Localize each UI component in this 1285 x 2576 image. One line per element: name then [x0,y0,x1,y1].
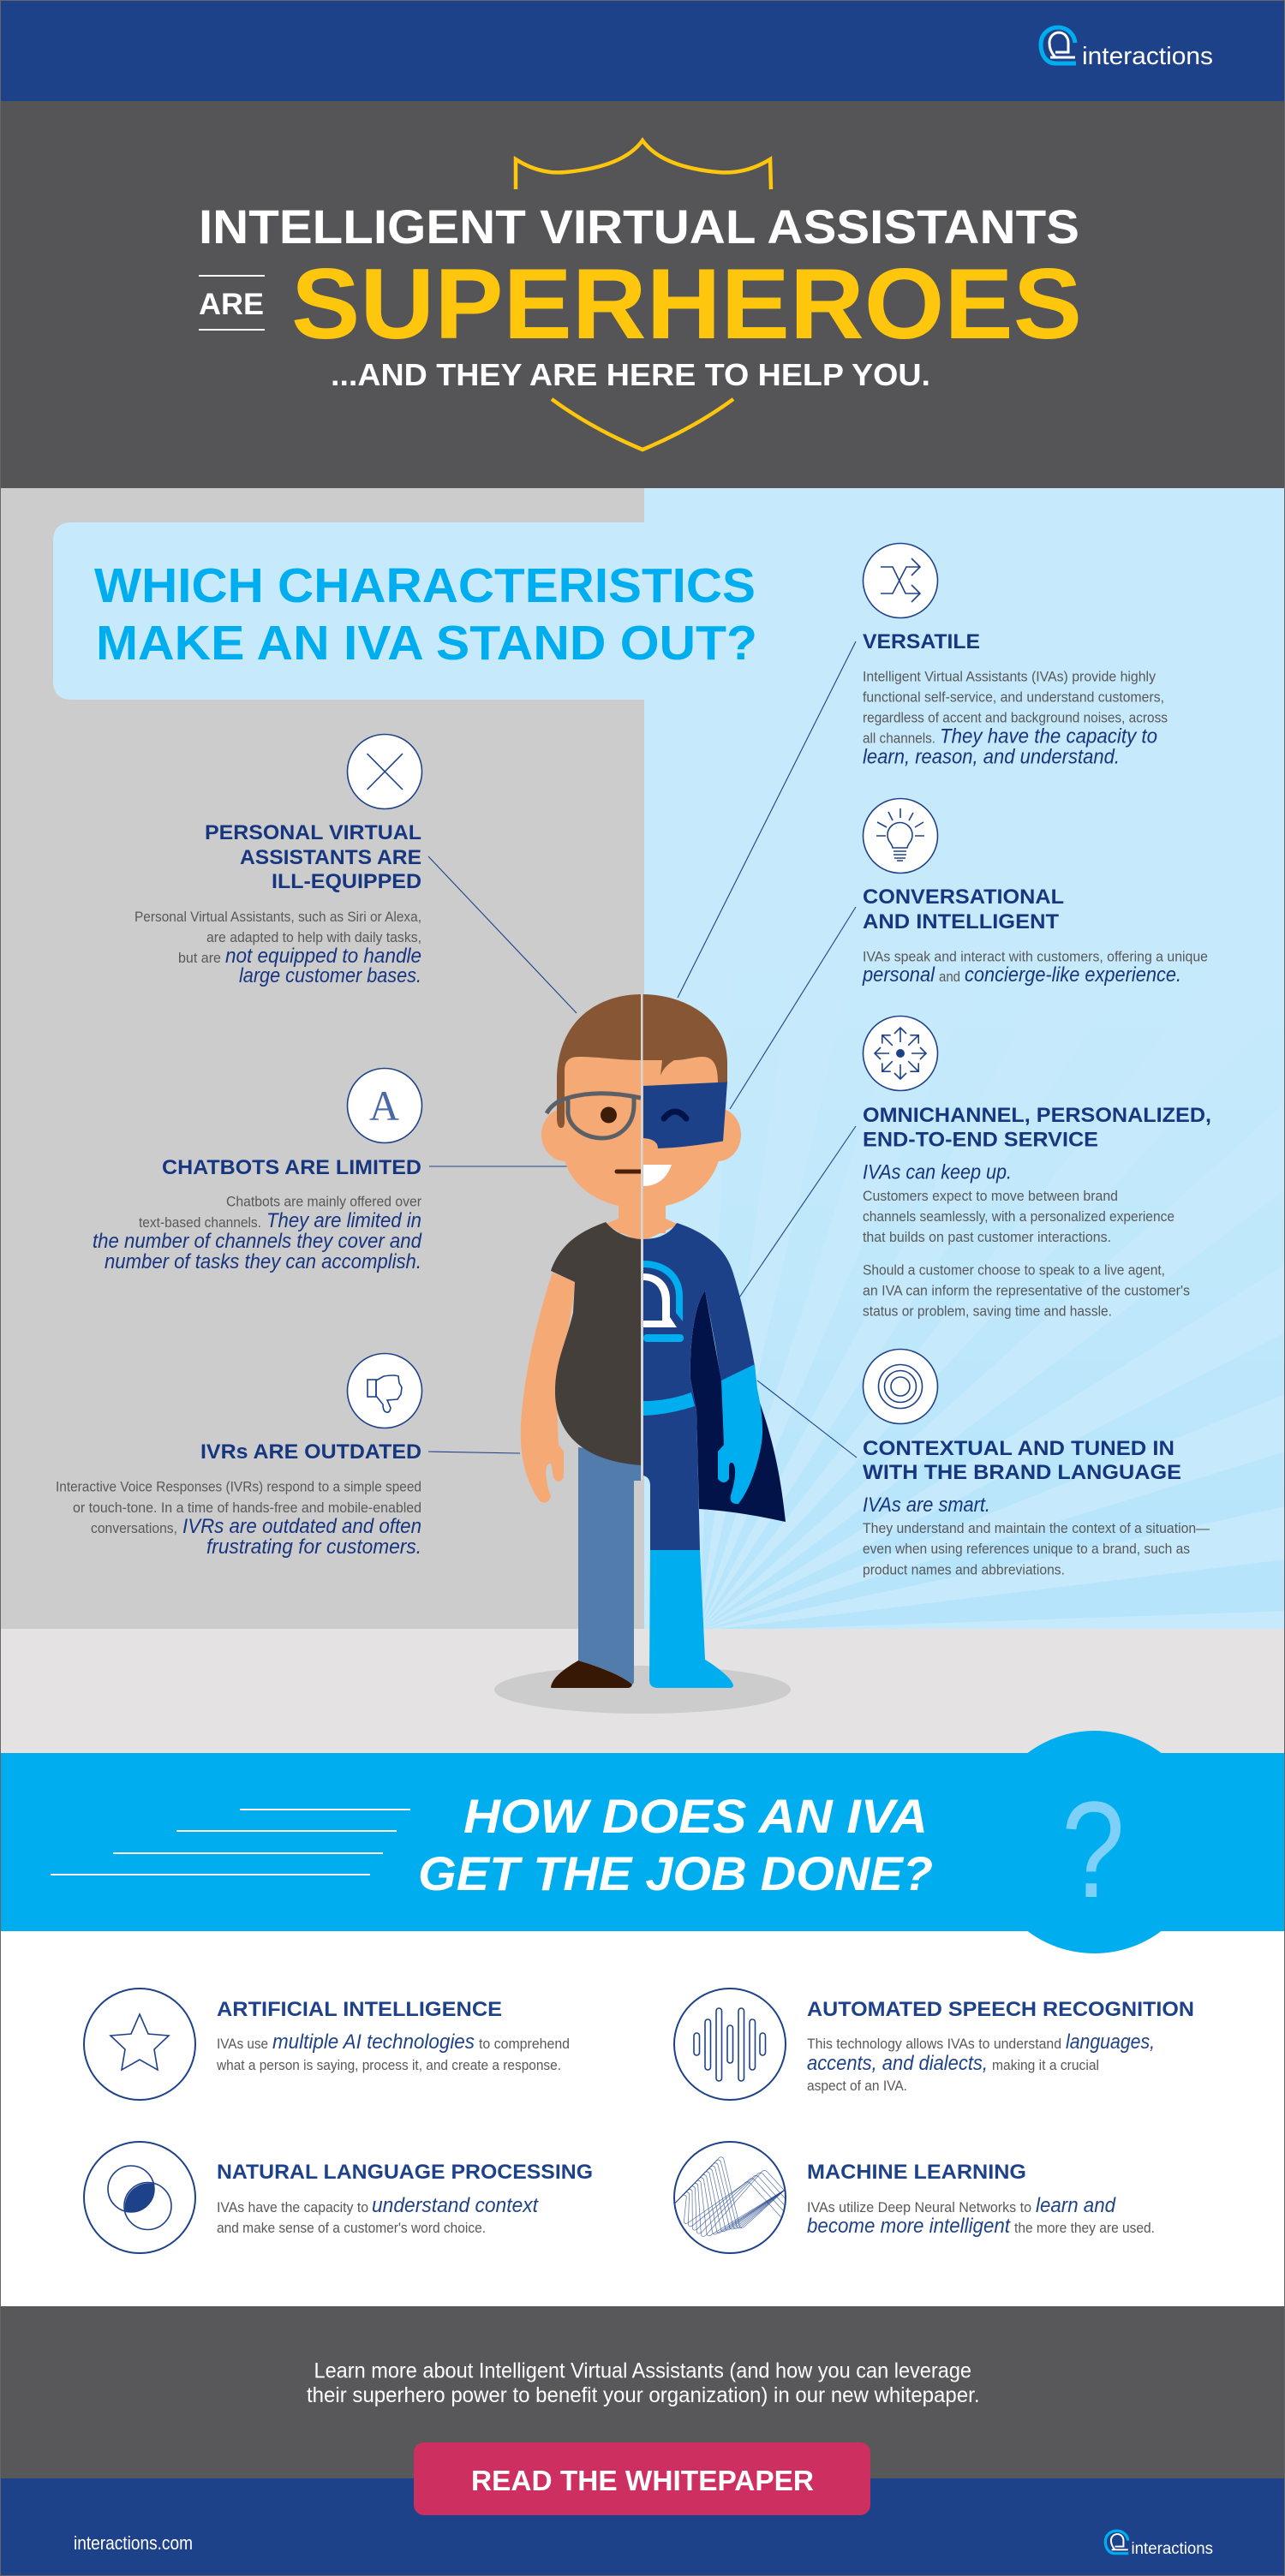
icon: cross [348,735,421,808]
text block: Chatbots are mainly offered over [226,1194,421,1209]
text block: become more intelligent [807,2215,1011,2238]
text block: and make sense of a customer's word choice. [217,2220,486,2236]
panel: IVRs [56,1353,421,1559]
icon: letter A [348,1069,421,1142]
subtitle: ...AND THEY ARE HERE TO HELP YOU. [331,357,930,392]
text block: large customer bases. [239,964,421,987]
neck and ears [541,1108,741,1242]
panel: personal virtual assistants [134,735,421,987]
text block: multiple AI technologies [272,2030,475,2054]
text block: concierge-like experience. [965,963,1181,987]
character: half ordinary, half superhero [494,993,791,1714]
footer logo [1105,2531,1213,2558]
footer bar [0,2478,1285,2576]
heading: conversational: AND INTELLIGENT [863,910,1059,933]
text block: functional self-service, and understand customers, [863,689,1164,706]
cape [690,1291,786,1522]
ordinary arm [521,1273,576,1503]
text block [863,668,1168,769]
text block [807,2030,1155,2094]
text block: or touch-tone. In a time of hands-free and mobile-enabled [73,1500,421,1516]
text block: personal [862,963,935,987]
text block [862,949,1208,987]
text block: not equipped to handle [225,945,421,968]
text block: making it a crucial [992,2057,1099,2073]
hero winking eye [664,1112,686,1118]
ordinary shoe [551,1661,632,1688]
text block: IVAs use [217,2036,268,2052]
item: artificial intelligence [84,1989,570,2100]
text block: accents, and dialects, [807,2052,988,2075]
t-shirt [551,1222,641,1465]
text block: text-based channels. [139,1214,261,1231]
icon: star [84,1989,195,2100]
text block: Personal Virtual Assistants, such as Siri or Alexa, [134,909,421,925]
text block: an IVA can inform the representative of the customer's [863,1283,1190,1298]
footer text [307,2358,980,2407]
icon: question mark: ? [1061,1773,1125,1926]
icon: shuffle [864,543,937,618]
heading: contextual: WITH THE BRAND LANGUAGE [863,1461,1181,1484]
text block: the number of channels they cover and [93,1230,422,1253]
text block: to comprehend [479,2036,570,2052]
text block: all channels. [863,730,935,747]
text block: Intelligent Virtual Assistants (IVAs) provide highly [863,668,1156,685]
text block: languages, [1066,2030,1155,2054]
face [565,1057,719,1206]
panel: versatile [863,543,1168,769]
callout: which characteristics [53,522,757,700]
glasses [547,1094,641,1138]
panel: how section [83,1988,1192,2254]
text block: regardless of accent and background noises, across [863,709,1168,726]
text block: status or problem, saving time and hassle. [863,1303,1112,1319]
text block [93,1194,422,1273]
heading: personal virtual assistants [205,821,421,893]
footer call to action panel [0,2306,1285,2478]
connector lines [428,641,857,1458]
item: machine learning [671,2142,1155,2253]
text block: IVAs can keep up. [863,1161,1012,1184]
hero suit [643,1223,755,1550]
ordinary mouth [617,1170,641,1173]
banner heading: GET THE JOB DONE? [418,1846,933,1900]
item: natural language processing [84,2142,593,2253]
text block: product names and abbreviations. [863,1562,1065,1577]
heading: omnichannel: OMNICHANNEL, PERSONALIZED, [863,1104,1211,1127]
panel: chatbots [93,1069,422,1273]
text block: learn and [1036,2194,1116,2217]
text block: conversations, [91,1520,177,1536]
shield bottom outline [552,399,733,450]
logo: interactions: interactions [1082,43,1213,70]
icon: sound wave [674,1989,786,2100]
text block: IVAs speak and interact with customers, offering a unique [863,949,1208,964]
text block: and [939,969,960,985]
icon: venn diagram [84,2142,195,2253]
text block: that builds on past customer interactions. [863,1229,1111,1245]
icon: letter A: A [369,1082,399,1130]
text block: Interactive Voice Responses (IVRs) respond to a simple speed [56,1478,421,1495]
chest logo [643,1261,684,1342]
heading: omnichannel [863,1104,1211,1151]
text block: IVAs are smart. [863,1494,990,1517]
text block: Should a customer choose to speak to a live agent, [863,1262,1165,1278]
text block: learn, reason, and understand. [863,745,1120,769]
ground shadow [494,1666,791,1714]
text block [807,2194,1155,2238]
heading: omnichannel: END-TO-END SERVICE [863,1129,1098,1151]
banner heading: HOW DOES AN IVA [463,1789,928,1843]
ordinary eye [601,1106,617,1124]
text block: This technology allows IVAs to understand [807,2036,1061,2052]
heading: conversational [863,886,1064,933]
text block [134,909,421,987]
icon: concentric circles [864,1350,937,1423]
heading: personal virtual assistants: PERSONAL VIRTUAL [205,821,421,844]
panel: conversational [862,798,1208,987]
title line 1: INTELLIGENT VIRTUAL ASSISTANTS [199,200,1079,253]
heading: contextual: CONTEXTUAL AND TUNED IN [863,1437,1174,1460]
footer text: their superhero power to benefit your organization) in our new whitepaper. [307,2383,980,2407]
shield top outline [516,140,771,189]
text block [217,2194,539,2236]
banner heading [418,1789,933,1900]
text block: number of tasks they can accomplish. [105,1250,421,1273]
are with rules: ARE [199,288,264,321]
text block: even when using references unique to a brand, such as [863,1541,1190,1557]
text block: IVRs are outdated and often [182,1515,421,1538]
hero glove [718,1364,762,1504]
center divider [641,993,642,1480]
hero boot [649,1550,733,1688]
text block: They have the capacity to [940,724,1157,748]
text block: but are [178,950,221,966]
heading: personal virtual assistants: ASSISTANTS ARE [240,846,421,869]
heading: personal virtual assistants: ILL-EQUIPPED [272,870,421,893]
text block: aspect of an IVA. [807,2078,907,2094]
callout: which characteristics: WHICH CHARACTERISTICS [94,558,756,613]
callout: which characteristics: MAKE AN IVA STAND OUT? [96,616,757,671]
text block [216,2030,570,2073]
heading: contextual [863,1437,1181,1484]
title superheroes: SUPERHEROES [291,247,1082,360]
text block: what a person is saying, process it, and create a response. [216,2057,561,2073]
text block [863,1494,1210,1577]
item: automated speech recognition [674,1989,1194,2100]
speed lines [51,1809,410,1875]
title panel [0,101,1285,488]
icon: thumbs down [348,1353,421,1428]
footer text: Learn more about Intelligent Virtual Assistants (and how you can leverage [314,2358,971,2382]
ordinary leg [578,1447,641,1685]
heading: ARTIFICIAL INTELLIGENCE [217,1998,502,2021]
text block [56,1478,421,1559]
background split: ordinary vs hero [1,488,1284,1753]
heading: versatile: VERSATILE [863,630,980,653]
text block: frustrating for customers. [206,1535,421,1559]
button: read the whitepaper: READ THE WHITEPAPER [471,2465,814,2496]
heading: MACHINE LEARNING [807,2161,1026,2184]
hair [557,994,727,1128]
text block: Customers expect to move between brand [863,1188,1118,1204]
icon: arrows outward [864,1016,937,1091]
text block: IVAs utilize Deep Neural Networks to [807,2199,1031,2215]
text block: understand context [372,2194,539,2217]
button: read the whitepaper [414,2442,870,2515]
hero belt [643,1392,695,1416]
text block [863,1161,1190,1319]
hero smile [643,1165,672,1186]
logo: interactions [1041,27,1213,70]
text block: are adapted to help with daily tasks, [206,929,421,945]
text block: IVAs have the capacity to [217,2199,368,2215]
text block: They understand and maintain the context of a situation— [863,1520,1210,1536]
heading: IVRs: IVRs ARE OUTDATED [200,1440,421,1464]
heading: conversational: CONVERSATIONAL [863,886,1064,909]
icon: light bulb [864,798,937,874]
heading: AUTOMATED SPEECH RECOGNITION [807,1998,1194,2021]
site url: interactions.com [74,2532,193,2554]
section banner: how does an IVA get the job done [0,1731,1285,1953]
heading: NATURAL LANGUAGE PROCESSING [217,2161,593,2184]
icon: neural wave [673,2141,786,2254]
heading: chatbots: CHATBOTS ARE LIMITED [162,1156,421,1179]
text block: They are limited in [266,1209,421,1232]
footer logo: interactions [1131,2540,1213,2558]
text block: the more they are used. [1014,2220,1155,2236]
text block: channels seamlessly, with a personalized experience [863,1208,1174,1225]
hero mask [643,1082,727,1148]
panel: contextual [863,1350,1210,1577]
panel: omnichannel [863,1016,1211,1319]
header bar [0,0,1285,101]
are with rules [199,275,265,331]
